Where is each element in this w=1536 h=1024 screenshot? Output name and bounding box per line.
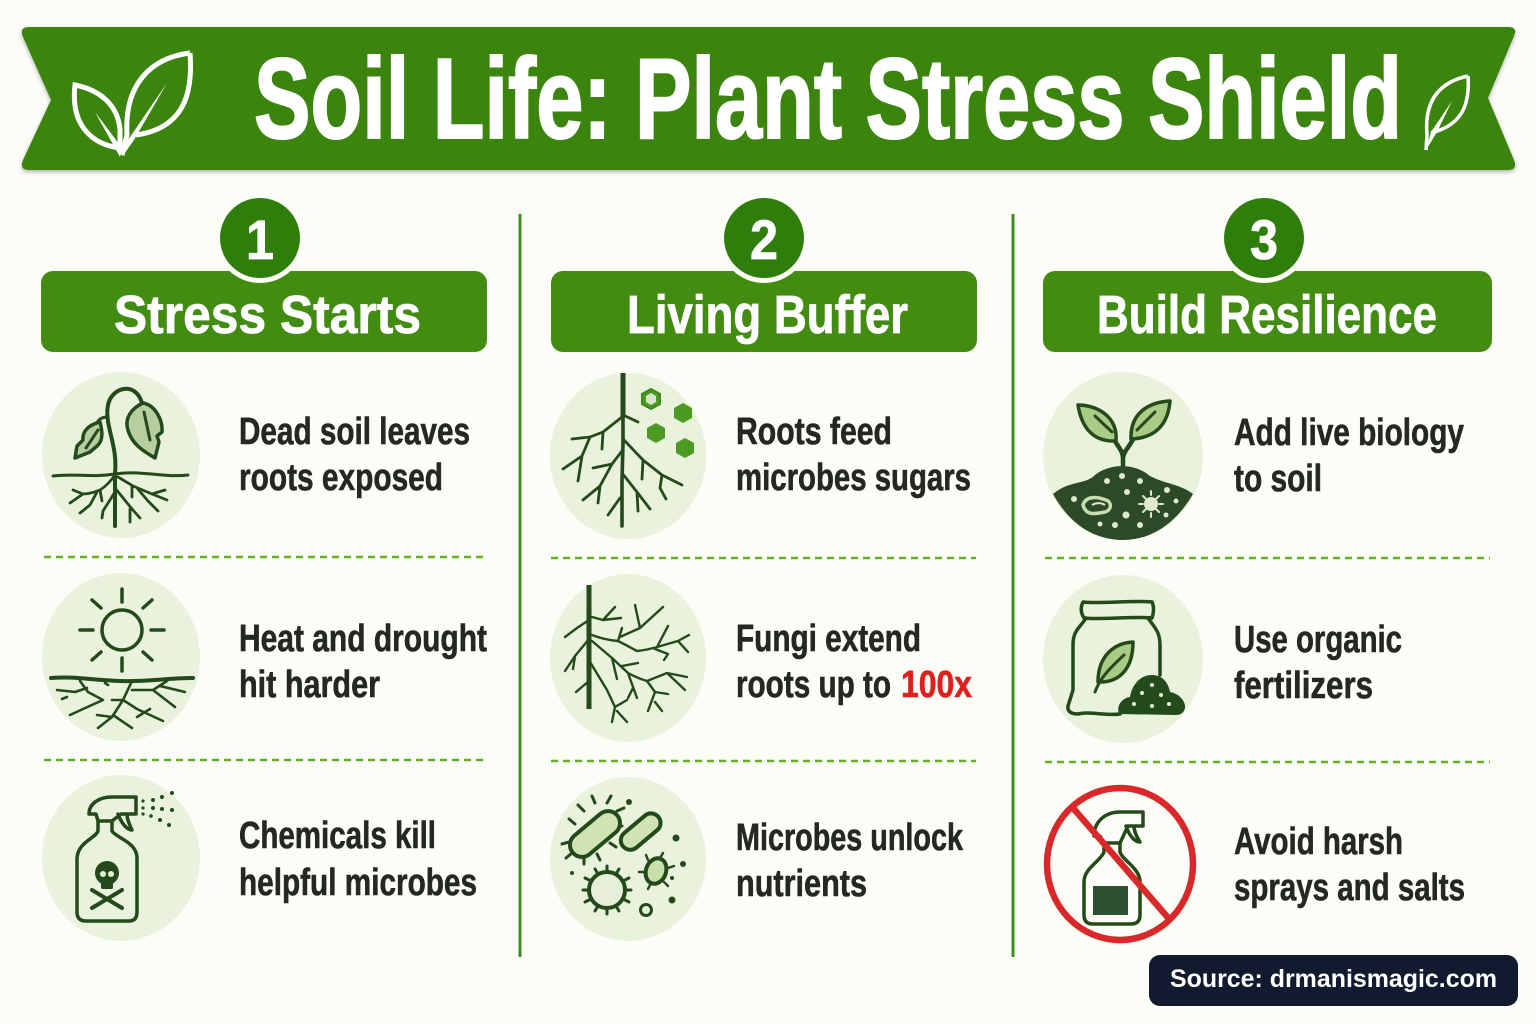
icon: wilting plant	[42, 372, 200, 538]
icon: poison spray bottle	[42, 775, 200, 941]
heading: Build Resilience	[1043, 193, 1492, 352]
text: chemicals	[239, 815, 477, 904]
text: fungi: Fungi extend	[736, 618, 921, 660]
text: microbes: nutrients	[736, 863, 867, 905]
text: heat: Heat and drought	[239, 618, 487, 660]
heading: Living Buffer: Living Buffer	[627, 285, 908, 345]
column dividers	[520, 214, 1013, 957]
icon: double leaf	[74, 53, 191, 157]
heading: Build Resilience: 3	[1250, 208, 1278, 271]
panel: living buffer	[550, 193, 977, 941]
icon: sun and cracked soil	[42, 573, 200, 741]
heading: Living Buffer	[551, 193, 977, 352]
text: chemicals: Chemicals kill	[239, 815, 436, 857]
text: heat: hit harder	[239, 664, 380, 706]
text: microbes	[736, 817, 964, 905]
text: fungi: roots up to	[736, 664, 891, 706]
icon: roots and sugars	[550, 373, 706, 539]
text: roots feed: Roots feed	[736, 411, 892, 453]
text: avoid: sprays and salts	[1234, 867, 1465, 909]
text: organic: fertilizers	[1234, 665, 1373, 707]
heading: Living Buffer: 2	[750, 208, 778, 271]
title banner	[22, 27, 1515, 170]
text: roots feed: microbes sugars	[736, 457, 971, 499]
text: add live biology: to soil	[1234, 458, 1322, 500]
text: microbes: Microbes unlock	[736, 817, 964, 859]
text: avoid	[1234, 821, 1465, 909]
icon: sprout in living soil	[1043, 372, 1203, 540]
text: dead soil: roots exposed	[239, 457, 443, 499]
text: add live biology	[1234, 412, 1464, 500]
heading: Stress Starts: 1	[246, 208, 274, 271]
icon: microbes	[550, 777, 706, 941]
text: avoid: Avoid harsh	[1234, 821, 1403, 863]
text: heat	[239, 618, 487, 706]
text: add live biology: Add live biology	[1234, 412, 1464, 454]
heading: Stress Starts	[41, 193, 487, 352]
icon: single leaf	[1426, 76, 1468, 150]
icon: no spray bottle	[1047, 788, 1193, 940]
text: dead soil	[239, 411, 470, 499]
text: chemicals: helpful microbes	[239, 862, 477, 904]
text: roots feed	[736, 411, 971, 499]
icon: fungal network	[550, 574, 706, 742]
text: dead soil: Dead soil leaves	[239, 411, 470, 453]
text: organic	[1234, 619, 1402, 707]
text: organic: Use organic	[1234, 619, 1402, 661]
icon: organic fertilizer bag	[1043, 575, 1203, 743]
source badge	[1149, 955, 1518, 1006]
source badge: Source: drmanismagic.com	[1170, 965, 1497, 993]
heading: Build Resilience: Build Resilience	[1097, 285, 1437, 345]
panel: build resilience	[1043, 193, 1492, 940]
panel: stress starts	[41, 193, 487, 941]
text: fungi: 100x	[901, 664, 972, 706]
text: fungi	[736, 618, 972, 706]
heading: Stress Starts: Stress Starts	[114, 285, 421, 345]
